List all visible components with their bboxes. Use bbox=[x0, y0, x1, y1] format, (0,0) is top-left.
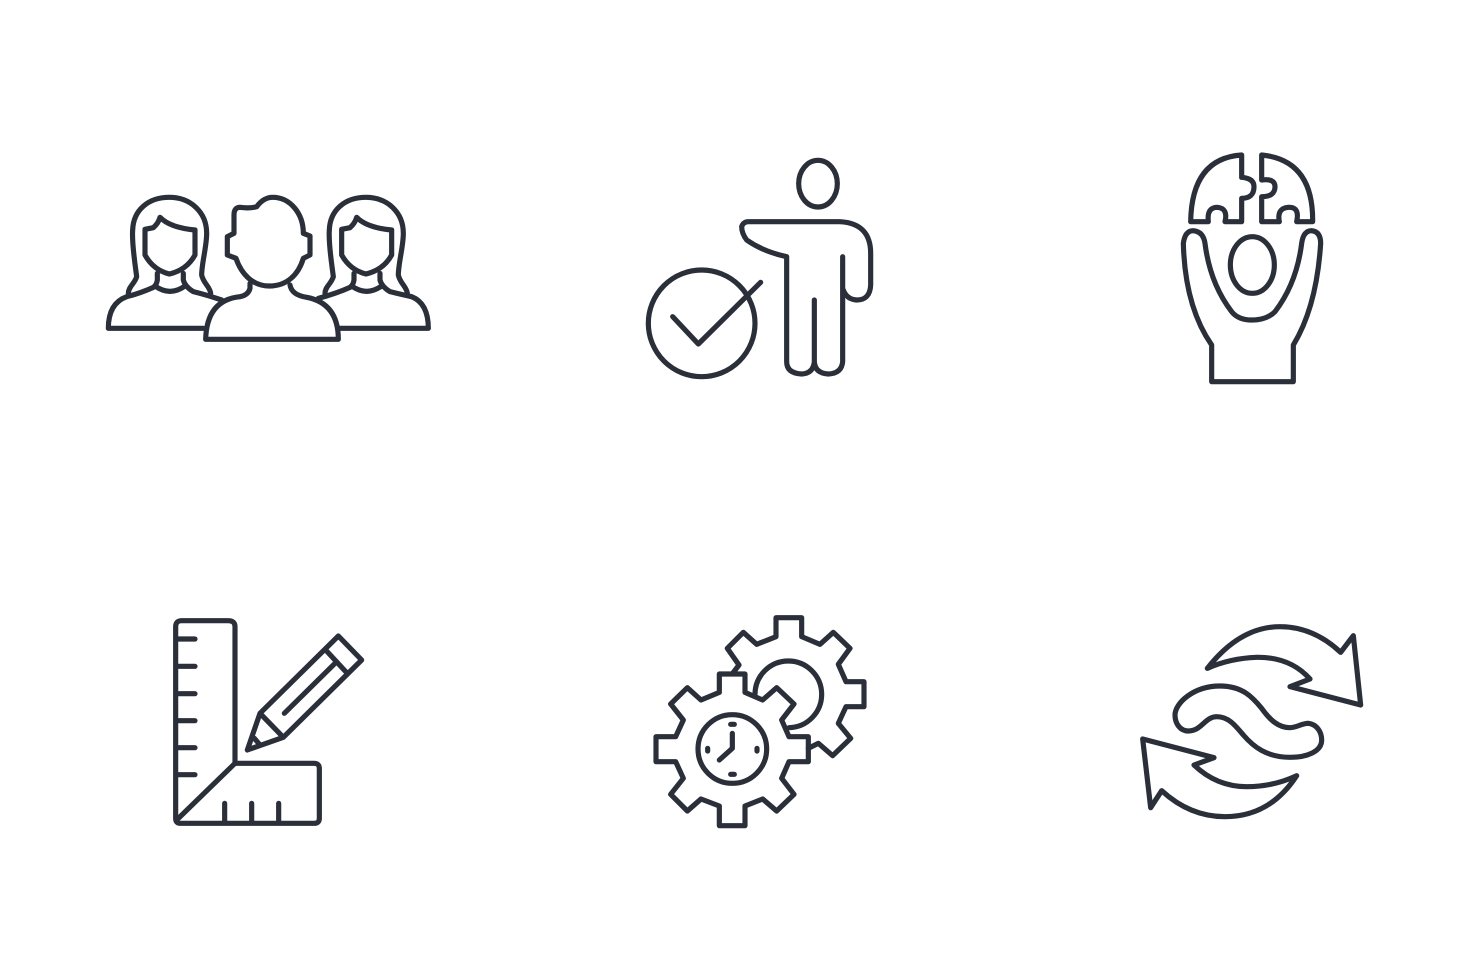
right woman bbox=[318, 197, 428, 328]
head bbox=[1230, 237, 1274, 293]
left puzzle piece bbox=[1191, 155, 1254, 222]
set square bbox=[176, 621, 319, 823]
icon: set square and pencil bbox=[176, 621, 362, 823]
front gear bbox=[656, 674, 808, 826]
body bbox=[742, 222, 871, 374]
ruler ticks bbox=[178, 639, 279, 822]
raised arms body bbox=[1183, 231, 1321, 382]
icon: person raising puzzle brain bbox=[1183, 155, 1321, 382]
head bbox=[799, 160, 837, 207]
left woman bbox=[108, 197, 222, 328]
clock bbox=[698, 715, 767, 783]
middle wave bbox=[1175, 686, 1322, 757]
back gear bbox=[727, 618, 864, 756]
bottom arrow bbox=[1143, 739, 1297, 817]
top arrow bbox=[1207, 627, 1361, 705]
check mark bbox=[673, 282, 761, 344]
icon: person pointing at check mark bbox=[648, 160, 871, 377]
icon: team of three people bbox=[108, 197, 428, 339]
centre man bbox=[206, 197, 338, 339]
right puzzle piece bbox=[1262, 155, 1313, 222]
check circle bbox=[648, 270, 755, 377]
icon: exchange arrows bbox=[1143, 627, 1361, 817]
pencil bbox=[247, 636, 362, 750]
icon: gears with clock bbox=[656, 618, 864, 826]
